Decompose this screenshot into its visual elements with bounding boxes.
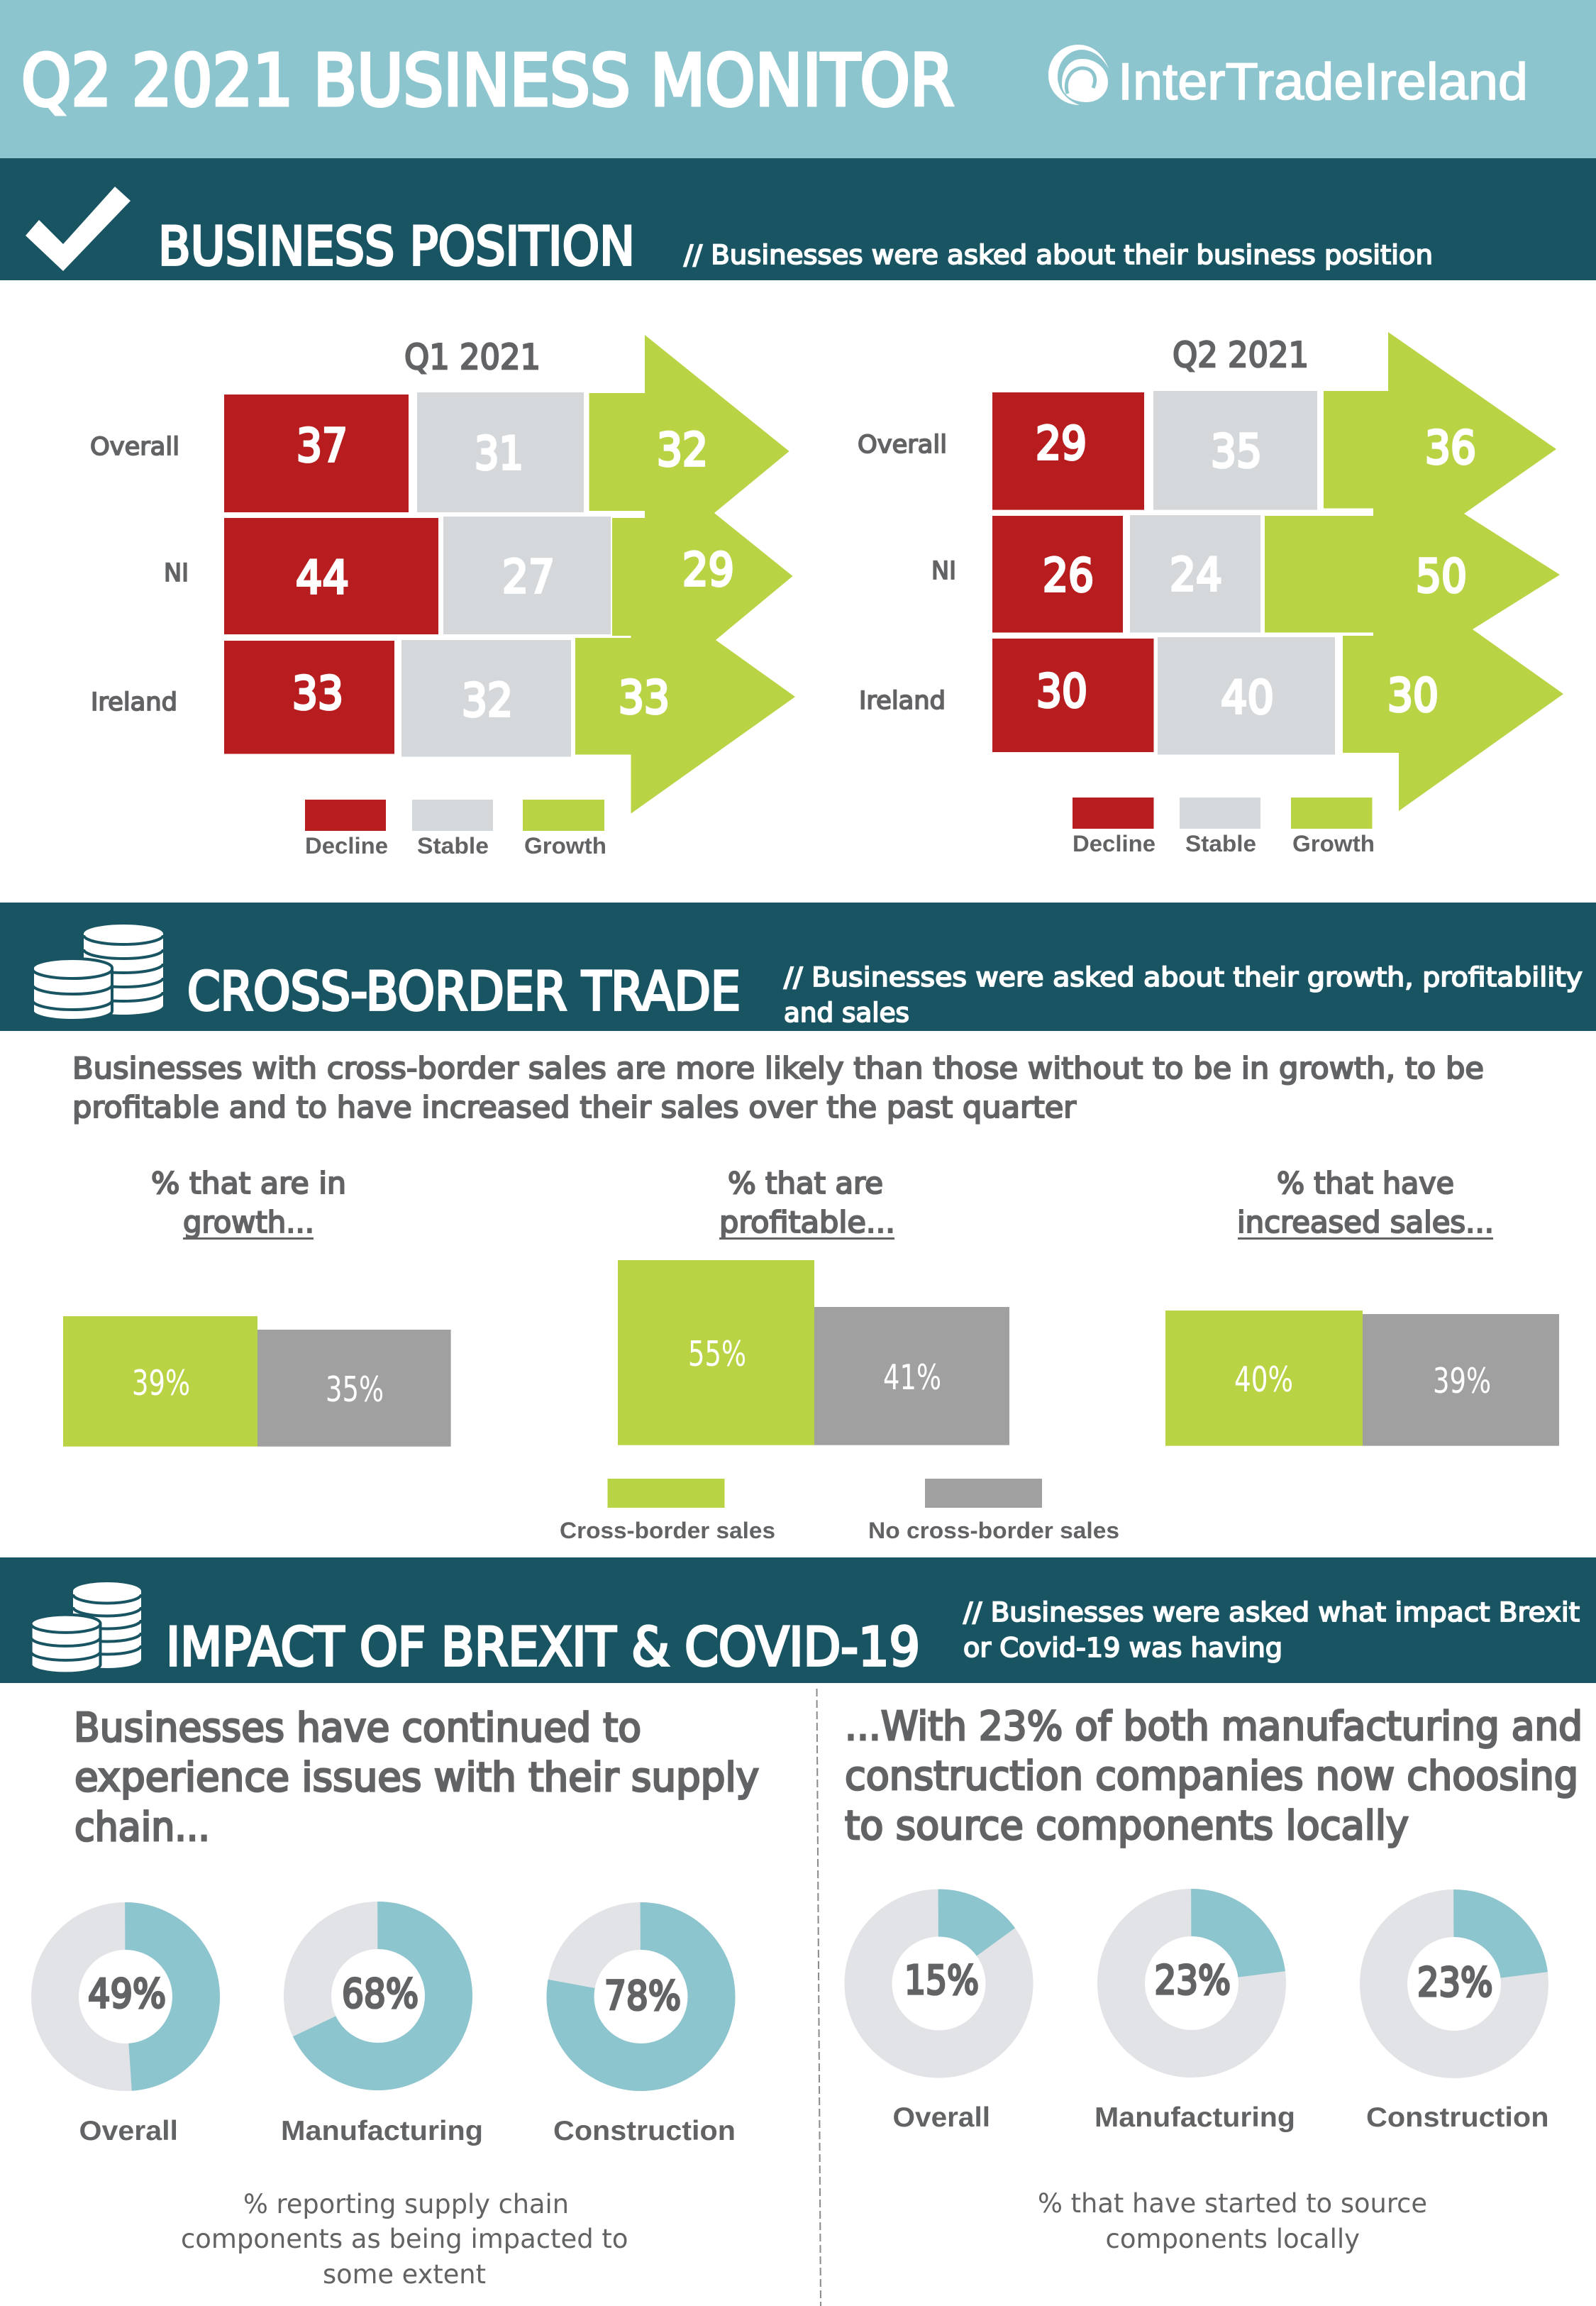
row: NI: 50 [1416, 551, 1467, 603]
chart title: Q1 2021 [404, 337, 541, 377]
panel: profitable bars [618, 1166, 1009, 1445]
legend [305, 800, 606, 859]
icon: coin stacks [33, 925, 163, 1020]
caption: supply chain: components as being impacted to [181, 2224, 628, 2254]
donut: manufacturing 68%: Manufacturing [281, 2116, 483, 2146]
caption: supply chain [181, 2189, 628, 2290]
chart heading: profitable... [719, 1205, 895, 1240]
donut: manufacturing 23%: Manufacturing [1095, 2102, 1295, 2133]
section description: and sales [784, 998, 909, 1028]
donut: manufacturing 23% [1095, 1913, 1295, 2133]
donut: construction 78% [553, 1926, 736, 2146]
chart heading [719, 1166, 895, 1240]
section description [784, 962, 1583, 1028]
chart heading: % that are in [151, 1166, 346, 1201]
donut: overall 49% [55, 1926, 196, 2146]
donut: construction 78%: 78% [604, 1973, 681, 2019]
donut: overall 15%: 15% [904, 1958, 979, 2004]
icon: check mark [26, 187, 131, 271]
section description [963, 1597, 1580, 1663]
row: Overall [90, 335, 789, 513]
row: Overall: 31 [475, 428, 523, 480]
row: NI: 26 [1043, 550, 1094, 602]
row: Overall: 35 [1211, 426, 1262, 478]
row: NI: NI [931, 557, 956, 585]
panel: Q2 2021 chart [858, 332, 1563, 856]
legend: Growth [1292, 831, 1375, 856]
row: Ireland [91, 638, 795, 814]
bar: no cross-border 39% [1363, 1314, 1559, 1446]
icon: logo swirl [1048, 45, 1109, 105]
chart heading [1237, 1166, 1494, 1240]
text block: cross-border summary [72, 1051, 1484, 1125]
donut: construction 23%: Construction [1366, 2102, 1549, 2133]
bar: cross-border 55% [618, 1260, 814, 1445]
icon: coin stacks [31, 1582, 141, 1673]
row: Overall: 32 [657, 424, 708, 477]
section header: business position [0, 158, 1596, 280]
row: Ireland [859, 629, 1563, 811]
row: Overall: 37 [297, 420, 348, 473]
legend: cross-border bars [560, 1479, 1119, 1543]
section header: cross-border trade [0, 903, 1596, 1031]
section description: // Businesses were asked what impact Brexit [963, 1597, 1580, 1628]
chart heading: % that are [728, 1166, 883, 1201]
logo: InterTradeIreland [1048, 45, 1528, 111]
legend: Decline [1073, 831, 1156, 856]
donut: manufacturing 68%: 68% [342, 1971, 419, 2017]
row: Ireland: 30 [1036, 666, 1087, 718]
bar: cross-border 40%: 40% [1234, 1359, 1293, 1400]
section description: // Businesses were asked about their growth, profitability [784, 962, 1583, 993]
bar: no cross-border 41% [814, 1307, 1009, 1445]
section header: impact of Brexit and Covid-19 [0, 1557, 1596, 1683]
heading: local sourcing [845, 1704, 1583, 1849]
row: NI: 27 [502, 551, 555, 604]
panel: supply chain issues [55, 1705, 759, 2290]
caption: local sourcing [1038, 2188, 1427, 2254]
row: Ireland: Ireland [859, 687, 946, 715]
legend: Decline [305, 833, 388, 859]
donut: manufacturing 68% [281, 1926, 483, 2146]
row: Overall: Overall [90, 433, 179, 461]
chart title: Q2 2021 [1173, 335, 1309, 375]
row: NI: 24 [1170, 549, 1222, 602]
row: NI: NI [164, 559, 189, 587]
row: Ireland: 33 [292, 668, 343, 720]
heading: local sourcing: to source components locally [845, 1803, 1409, 1849]
panel: increased sales bars [1165, 1166, 1559, 1446]
heading: business position: BUSINESS POSITION [158, 215, 635, 277]
heading: cross-border trade: CROSS-BORDER TRADE [187, 960, 741, 1022]
donut: construction 78%: Construction [553, 2116, 736, 2146]
bar: cross-border 55%: 55% [688, 1334, 746, 1374]
chart heading [151, 1166, 346, 1240]
donut: overall 15%: Overall [892, 2102, 990, 2133]
donut: manufacturing 23%: 23% [1155, 1958, 1231, 2004]
caption: supply chain: some extent [323, 2259, 486, 2290]
row: Ireland: 40 [1221, 672, 1274, 724]
heading: impact of Brexit and Covid-19: IMPACT OF BREXIT & COVID-19 [166, 1616, 920, 1678]
chart heading: increased sales... [1237, 1205, 1494, 1240]
heading: supply chain [74, 1705, 759, 1850]
caption: local sourcing: % that have started to source [1038, 2188, 1427, 2219]
row: Ireland: 30 [1387, 670, 1439, 722]
bar: no cross-border 35%: 35% [326, 1369, 384, 1410]
heading: supply chain: chain... [74, 1804, 210, 1850]
heading: supply chain: Businesses have continued to [74, 1705, 641, 1751]
caption: supply chain: % reporting supply chain [243, 2189, 569, 2219]
legend: Stable [417, 833, 489, 859]
legend: Growth [524, 833, 606, 859]
bar: cross-border 39%: 39% [132, 1363, 190, 1403]
donut: overall 49%: Overall [79, 2116, 178, 2146]
heading: local sourcing: construction companies now choosing [845, 1753, 1578, 1799]
bar: no cross-border 39%: 39% [1433, 1361, 1491, 1401]
row: Overall: 29 [1036, 418, 1087, 470]
row: NI [931, 514, 1560, 633]
row: Ireland: 32 [462, 675, 513, 727]
bar: no cross-border 41%: 41% [883, 1357, 941, 1398]
heading: supply chain: experience issues with their supply [74, 1755, 759, 1801]
panel: Q1 2021 chart [90, 335, 795, 859]
row: Overall [858, 332, 1556, 514]
panel: local sourcing [845, 1704, 1583, 2254]
text block: cross-border summary: profitable and to have increased their sales over the past quarter [72, 1090, 1077, 1125]
row: Ireland: 33 [619, 672, 670, 724]
row: NI: 44 [296, 552, 349, 605]
donut: overall 15% [868, 1913, 1009, 2133]
donut: construction 23% [1366, 1913, 1549, 2133]
panel: growth bars [63, 1166, 451, 1447]
section description: or Covid-19 was having [963, 1633, 1282, 1663]
donut: construction 23%: 23% [1417, 1960, 1492, 2006]
bar: cross-border 40% [1165, 1311, 1363, 1446]
chart heading: % that have [1277, 1166, 1454, 1201]
header band [0, 0, 1596, 158]
section description: // Businesses were asked about their business position [684, 240, 1433, 270]
row: NI [164, 513, 793, 640]
bar: no cross-border 35% [257, 1330, 451, 1447]
legend: Stable [1185, 831, 1256, 856]
title: Q2 2021 BUSINESS MONITOR [21, 39, 954, 122]
legend [1073, 798, 1375, 856]
legend: cross-border bars: No cross-border sales [868, 1518, 1119, 1543]
logo wordmark: InterTradeIreland [1118, 53, 1528, 111]
row: NI: 29 [682, 544, 734, 597]
legend: cross-border bars: Cross-border sales [560, 1518, 775, 1543]
donut: overall 49%: 49% [88, 1971, 166, 2017]
row: Overall: Overall [858, 431, 947, 459]
text block: cross-border summary: Businesses with cross-border sales are more likely than those without to be in growth, to be [72, 1051, 1484, 1086]
caption: local sourcing: components locally [1105, 2224, 1360, 2254]
bar: cross-border 39% [63, 1316, 257, 1447]
chart heading: growth... [183, 1205, 314, 1240]
row: Overall: 36 [1425, 422, 1476, 475]
row: Ireland: Ireland [91, 688, 177, 717]
